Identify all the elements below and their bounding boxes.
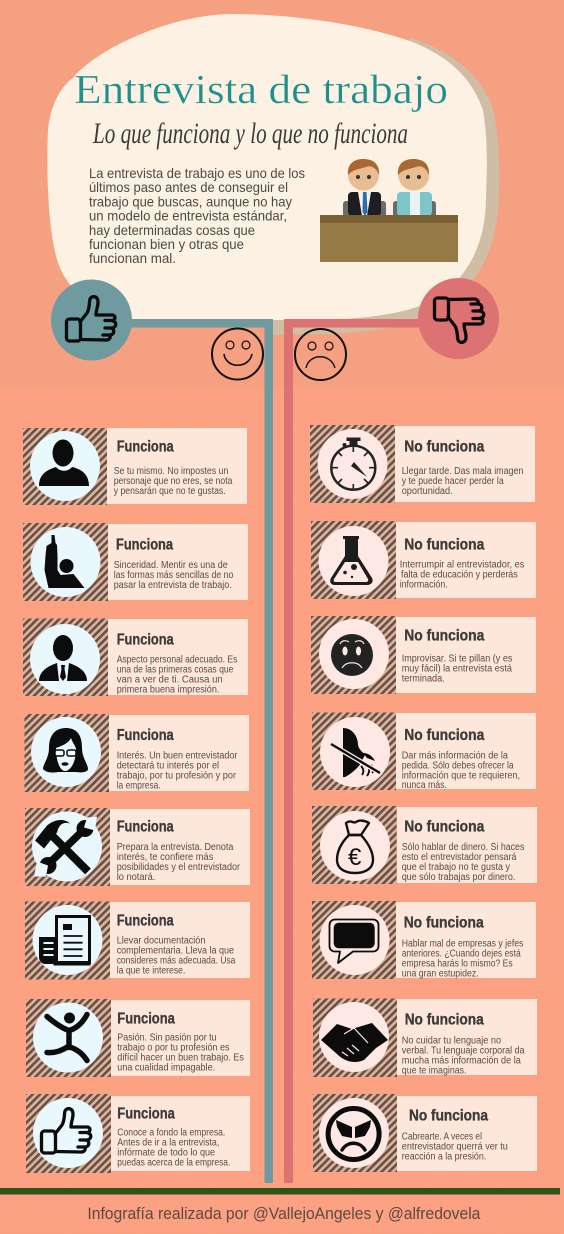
heading: Funciona bbox=[117, 913, 174, 930]
heading: Funciona bbox=[117, 439, 174, 456]
card: Llegar tarde bbox=[310, 425, 535, 503]
heading: Funciona bbox=[116, 536, 173, 553]
description: Antes de ir a la entrevista, bbox=[117, 1138, 219, 1149]
description: Improvisar. Si te pillan (y es bbox=[402, 654, 512, 665]
icon: hammer and wrench bbox=[34, 816, 97, 876]
description: que sólo trabajas por dinero. bbox=[402, 872, 515, 883]
description: nunca más. bbox=[402, 780, 447, 791]
description: y te puede hacer perder la bbox=[402, 476, 504, 487]
icon: sad face solid bbox=[331, 634, 373, 676]
heading: No funciona bbox=[404, 536, 485, 553]
description: terminada. bbox=[402, 674, 445, 685]
description: una gran estupidez. bbox=[402, 969, 479, 980]
intro paragraph: funcionan mal. bbox=[89, 250, 176, 266]
intro paragraph: últimos paso antes de conseguir el bbox=[89, 179, 288, 195]
icon: smiley bbox=[212, 328, 263, 380]
icon: sad face bbox=[295, 329, 346, 380]
page background: top bbox=[0, 0, 564, 388]
description: oportunidad. bbox=[402, 486, 453, 497]
header blob panel bbox=[47, 14, 487, 320]
description bbox=[402, 466, 523, 497]
intro paragraph: funcionan bien y otras que bbox=[89, 236, 244, 252]
intro paragraph: hay determinadas cosas que bbox=[89, 222, 255, 238]
heading: Funciona bbox=[117, 1105, 175, 1122]
desk bbox=[320, 215, 458, 262]
description: interés, te confiere más bbox=[117, 852, 213, 863]
blob shadow bbox=[273, 38, 499, 335]
card: Sinceridad bbox=[23, 523, 248, 601]
description: verbal. Tu lenguaje corporal da bbox=[402, 1045, 525, 1056]
icon: money bag bbox=[337, 821, 373, 873]
icon: thumb up bbox=[42, 1109, 91, 1153]
description: Prepara la entrevista. Denota bbox=[117, 842, 234, 853]
page background: lower grid bbox=[0, 388, 564, 1234]
heading: No funciona bbox=[405, 1011, 484, 1028]
description bbox=[402, 750, 520, 791]
description bbox=[117, 935, 236, 976]
description bbox=[117, 1033, 244, 1074]
description: detectará tu interés por el bbox=[117, 760, 219, 771]
description: Pasión. Sin pasión por tu bbox=[117, 1033, 217, 1044]
description: anteriores. ¿Cuando dejes está bbox=[402, 949, 521, 960]
description bbox=[402, 939, 523, 980]
description: pasar la entrevista de trabajo. bbox=[114, 580, 232, 591]
description: mucha más información de la bbox=[402, 1055, 521, 1066]
interviewer right bbox=[393, 159, 436, 217]
description: complementaria. Lleva la que bbox=[117, 945, 234, 956]
intro paragraph: La entrevista de trabajo es uno de los bbox=[89, 165, 305, 181]
description: posibilidades y el entrevistador bbox=[117, 862, 241, 873]
heading: No funciona bbox=[404, 628, 485, 645]
thumbs down badge bbox=[418, 278, 499, 359]
icon: speech bubble bbox=[330, 920, 378, 963]
heading: No funciona bbox=[404, 914, 484, 931]
icon: thumb up bbox=[66, 297, 116, 341]
description bbox=[402, 1035, 525, 1076]
description: información que te requieren, bbox=[402, 770, 520, 781]
description: Conoce a fondo la empresa. bbox=[117, 1128, 225, 1139]
description: información. bbox=[400, 579, 448, 590]
description bbox=[402, 654, 512, 685]
thumbs up badge bbox=[51, 280, 132, 360]
card: Conoce a fondo la empresa bbox=[26, 1094, 250, 1173]
description: trabajo, por tu profesión y por bbox=[117, 770, 237, 781]
description: infórmate de todo lo que bbox=[117, 1148, 215, 1159]
card: Dar más información bbox=[312, 712, 536, 791]
description bbox=[117, 654, 237, 695]
description: primera buena impresión. bbox=[117, 684, 219, 695]
illustration: two interviewers at a desk bbox=[320, 159, 458, 262]
description: falta de educación y perderás bbox=[401, 569, 518, 580]
card: Aspecto personal bbox=[23, 618, 248, 696]
red connector line bbox=[284, 319, 420, 1183]
heading: No funciona bbox=[409, 1108, 488, 1125]
description: Cabrearte. A veces el bbox=[402, 1131, 482, 1142]
description: entrevistador querrá ver tu bbox=[402, 1141, 508, 1152]
card: Interés bbox=[24, 714, 249, 792]
description: consideres más adecuada. Usa bbox=[117, 955, 236, 966]
description: que el trabajo no te gusta y bbox=[402, 862, 510, 873]
description: No cuidar tu lenguaje no bbox=[402, 1035, 501, 1046]
icon: money bag: € bbox=[348, 844, 362, 871]
description: Se tu mismo. No impostes un bbox=[114, 466, 228, 477]
card: Interrumpir bbox=[311, 521, 536, 599]
description: Sinceridad. Mentir es una de bbox=[114, 560, 228, 571]
heading: Funciona bbox=[117, 819, 174, 836]
description: Aspecto personal adecuado. Es bbox=[117, 654, 237, 665]
description: Sólo hablar de dinero. Si haces bbox=[402, 842, 524, 853]
description: y pensarán que no te gustas. bbox=[114, 486, 226, 497]
description bbox=[117, 1128, 230, 1169]
icon: man in suit bbox=[39, 635, 87, 681]
footer credit: Infografía realizada por @VallejoAngeles y @alfredovela bbox=[87, 1204, 481, 1223]
card: Pasión bbox=[26, 999, 250, 1077]
description: esto el entrevistador pensará bbox=[402, 852, 517, 863]
description: empresa harás lo mismo? Es bbox=[402, 959, 513, 970]
icon: documents bbox=[39, 916, 90, 964]
intro paragraph bbox=[89, 165, 305, 266]
description: trabajo o por tu profesión es bbox=[117, 1043, 230, 1054]
icon: person bbox=[39, 440, 89, 486]
description: puedas acerca de la empresa. bbox=[117, 1158, 230, 1169]
card: Prepara la entrevista bbox=[25, 808, 250, 886]
description: Dar más información de la bbox=[402, 750, 508, 761]
description: reacción a la presión. bbox=[402, 1151, 486, 1162]
heading: No funciona bbox=[404, 819, 485, 836]
teal connector line bbox=[130, 319, 273, 1183]
description: Llevar documentación bbox=[117, 935, 205, 946]
icon: jumping figure bbox=[47, 1012, 87, 1060]
description: Interés. Un buen entrevistador bbox=[117, 750, 238, 761]
description: van a ver de ti. Causa un bbox=[117, 674, 223, 685]
card: Improvisar bbox=[311, 616, 536, 694]
description: pedida. Sólo debes ofrecer la bbox=[402, 760, 514, 771]
card: Sólo hablar de dinero bbox=[312, 806, 537, 884]
card: Se tu mismo bbox=[23, 428, 247, 505]
description bbox=[402, 842, 524, 883]
description: que te imaginas. bbox=[402, 1065, 466, 1076]
description bbox=[114, 466, 233, 497]
heading: Funciona bbox=[117, 1010, 175, 1027]
description: lo notará. bbox=[117, 872, 155, 883]
description: Hablar mal de empresas y jefes bbox=[402, 939, 523, 950]
description bbox=[117, 842, 241, 883]
footer divider bbox=[0, 1188, 560, 1194]
description: las formas más sencillas de no bbox=[114, 570, 234, 581]
description: una cualidad impagable. bbox=[117, 1063, 215, 1074]
card: Lenguaje no verbal bbox=[313, 998, 537, 1077]
icon: thumb down bbox=[434, 298, 484, 342]
heading: No funciona bbox=[404, 727, 485, 744]
description bbox=[400, 559, 524, 590]
icon: handshake bbox=[321, 1023, 388, 1062]
icon: flask bbox=[330, 536, 373, 585]
description: muy fácil) la entrevista está bbox=[402, 664, 512, 675]
icon: crossed-out profile bbox=[331, 728, 380, 777]
description: la que te interese. bbox=[117, 965, 185, 976]
subtitle: Lo que funciona y lo que no funciona bbox=[92, 116, 408, 150]
description bbox=[117, 750, 238, 791]
description: Llegar tarde. Das mala imagen bbox=[402, 466, 523, 477]
description: una de las primeras cosas que bbox=[117, 664, 234, 675]
intro paragraph: trabajo que buscas, aunque no hay bbox=[89, 193, 292, 209]
card: Cabrearte bbox=[313, 1094, 537, 1172]
heading: Funciona bbox=[117, 631, 174, 648]
description: personaje que no eres, se nota bbox=[114, 476, 233, 487]
icon: woman with glasses bbox=[43, 728, 88, 773]
title: Entrevista de trabajo bbox=[74, 66, 448, 112]
description: Interrumpir al entrevistador, es bbox=[400, 559, 524, 570]
card: Hablar mal bbox=[312, 901, 536, 980]
icon: stopwatch bbox=[331, 438, 375, 490]
icon: raised hand bbox=[44, 535, 84, 588]
description bbox=[402, 1131, 508, 1162]
description bbox=[114, 560, 234, 591]
intro paragraph: un modelo de entrevista estándar, bbox=[89, 208, 287, 224]
heading: No funciona bbox=[404, 439, 485, 456]
description: difícil hacer un buen trabajo. Es bbox=[117, 1053, 244, 1064]
interviewer left bbox=[343, 159, 386, 217]
icon: angry face bbox=[328, 1108, 379, 1160]
description: la empresa. bbox=[117, 780, 161, 791]
heading: Funciona bbox=[117, 727, 174, 744]
card: Llevar documentación bbox=[25, 902, 250, 980]
